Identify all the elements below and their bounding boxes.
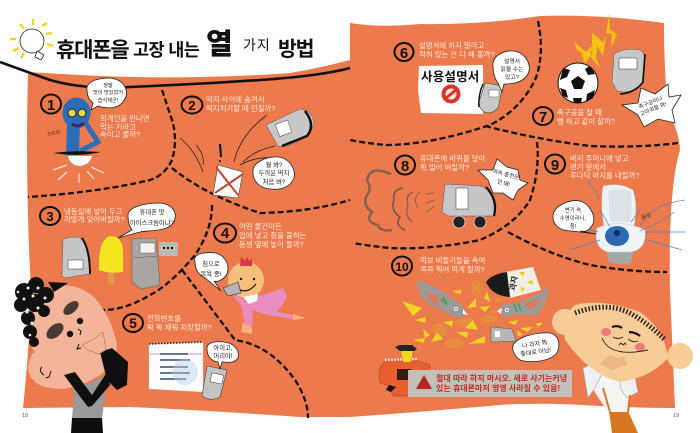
title: 고장 내는 (133, 40, 200, 60)
question text: 후다닥 바지를 내릴까? (570, 171, 639, 180)
icon: phone on wheels (442, 184, 496, 228)
icon: manual sheet: 사용설명서 (421, 70, 480, 84)
number 5: 5 (129, 315, 137, 331)
speech bubble: 설명서 (504, 57, 520, 65)
step 7: soccer ball (533, 15, 681, 127)
icon: snack crumbs (402, 280, 543, 348)
question text: 바지 주머니에 넣고 (570, 154, 629, 163)
body (72, 375, 107, 420)
step 6: manual (394, 41, 529, 114)
icon: phone (612, 49, 645, 94)
hand (600, 355, 627, 370)
step 2: ddakji (180, 95, 314, 198)
page number 18: 18 (22, 413, 28, 419)
question text: 휙 밀어 버릴까? (420, 163, 469, 172)
speech bubble: 변기 속 (565, 206, 581, 214)
speech bubble: 휴대폰 맛 (140, 207, 165, 216)
speech bubble: 아이고, (213, 343, 233, 352)
number 8: 8 (401, 158, 409, 175)
question text: 딱지치기할 때 던질까? (206, 104, 275, 113)
panel: right orange page (350, 16, 680, 417)
warning character (379, 345, 430, 396)
page number 19: 19 (673, 413, 679, 419)
icon: blue alien: 꼬르륵 (46, 130, 61, 138)
speech burst: 과속 충전은 (492, 167, 520, 182)
character: worried man left (14, 277, 128, 433)
icon: left pigeon (417, 280, 468, 318)
number 2: 2 (188, 98, 196, 113)
question text: 먹보 비둘기들을 속여 (420, 256, 485, 265)
title: 방법 (278, 38, 313, 61)
speech bubble: 첨! (570, 223, 577, 230)
speech burst: 고마워할 와! (638, 100, 668, 118)
speech bubble: 목욕 중! (201, 270, 222, 278)
step 4: baby (195, 222, 307, 334)
number 8 (395, 156, 415, 175)
question text: 딱지 사이에 숨겨서 (206, 95, 265, 104)
hair (14, 277, 68, 347)
speech bubble: 머리야! (213, 351, 233, 360)
question text: 까맣게 잊어버릴까? (64, 215, 125, 224)
speech bubble: 있고? (505, 73, 520, 81)
speech bubble (195, 253, 228, 291)
title brush line (0, 62, 350, 88)
icon: refrigerator (132, 238, 178, 289)
speech bubble (207, 342, 238, 369)
icon: phone (491, 327, 516, 342)
icon: warning triangle (416, 375, 432, 389)
icon: torn snack bag: 과자 (507, 274, 520, 291)
question text: 꽉 꽉 채워 저장할까? (147, 323, 212, 332)
speech bubble (87, 78, 126, 110)
pants (609, 411, 638, 433)
warning banner: 있는 휴대폰마저 영영 사라질 수 있음! (436, 383, 560, 393)
question text: 콕콕 찍어 먹게 할까? (420, 265, 485, 274)
question text: 변기 앞에서 (570, 162, 606, 172)
icon: frozen phone (62, 237, 90, 278)
speech bubble: 침으로 (202, 260, 220, 268)
step 3: freezer (40, 203, 178, 289)
icon: exhaust puffs (365, 171, 435, 230)
number 1: 1 (47, 97, 55, 114)
speech bubble: 아이스크림이냐? (130, 218, 175, 227)
icon: phone (478, 83, 503, 113)
icon: light bulb (10, 19, 53, 60)
step 1: alien (41, 78, 150, 183)
question text: 뻥 하고 같이 찰까? (557, 117, 615, 126)
warning banner (408, 370, 572, 397)
icon: lightning (574, 15, 617, 68)
step 5: phone numbers (123, 314, 238, 399)
number 3: 3 (46, 209, 54, 224)
warning banner: 절대 따라 하지 마시오. 새로 사기는커녕 (436, 373, 567, 383)
icon: notepad (149, 342, 203, 392)
question text: 적혀 있는 건 다 해 볼까? (419, 50, 495, 59)
speech bubble (513, 333, 559, 362)
question text: 어떤 물건이든 (239, 222, 282, 231)
speech bubble: 나 과자 뭐 (521, 338, 548, 350)
step 8: wheeled phone (365, 154, 528, 230)
hair (575, 307, 665, 340)
icon: phone in ddakji (180, 109, 314, 198)
number 10: 10 (395, 260, 409, 274)
panel: left orange page (23, 60, 350, 417)
speech bubble: 두꺼운 딱지 (259, 168, 289, 177)
speech burst: 안 돼! (496, 177, 512, 189)
speech bubble: 수영이라니, (560, 214, 587, 222)
speech bubble (253, 157, 294, 189)
head (564, 303, 668, 382)
shirt (590, 366, 632, 412)
question text: 설명서에 하지 말라고 (419, 41, 485, 50)
number 7 (533, 107, 553, 126)
number 4: 4 (221, 225, 230, 242)
question text: 냉동실에 넣어 두고 (64, 207, 123, 216)
speech burst (478, 159, 528, 200)
number 10 (392, 256, 412, 276)
icon: torn snack bag (486, 267, 541, 298)
question text: 입에 넣고 침을 붙히는 (239, 231, 307, 240)
speech bubble: 습식체군! (98, 96, 118, 104)
question text: 속이고 줄까? (100, 130, 140, 139)
speech bubble: 뭘 봐? (266, 160, 283, 169)
step 9: toilet (545, 154, 685, 264)
icon: phone (202, 366, 227, 399)
speech bubble: 정말 (103, 81, 113, 89)
speech burst: 축구공이나 (637, 94, 664, 111)
icon: soccer ball (558, 63, 598, 103)
title: 휴대폰을 (56, 39, 129, 62)
speech bubble: 맛이 맛있었어 (93, 88, 123, 96)
icon: ice cream bar (99, 236, 123, 284)
speech bubble: 처음 봐? (263, 177, 286, 186)
question text: 축구공을 찰 때 (557, 108, 602, 117)
speech bubble (553, 201, 596, 234)
question text: 휴대폰에 바퀴를 달아 (420, 154, 486, 163)
speech bubble (118, 203, 175, 238)
title: 열 (206, 28, 233, 61)
step 10: pigeons (392, 256, 559, 362)
face (601, 328, 611, 336)
question text: 외계인을 만나면 (100, 114, 150, 123)
number 7: 7 (539, 109, 547, 126)
speech burst (622, 84, 681, 127)
icon: crawling baby (223, 257, 306, 334)
question text: 동생 옆에 놓아 둘까? (239, 240, 304, 249)
speech bubble (493, 51, 529, 92)
head (27, 286, 117, 389)
character: smiling man right (552, 303, 693, 433)
number 6: 6 (400, 45, 408, 62)
ears (552, 309, 578, 335)
number 9: 9 (551, 157, 559, 174)
speech bubble: 좋대로 아님! (520, 346, 552, 358)
arms and hand (64, 372, 110, 407)
icon: toilet: 풍덩 (640, 212, 652, 222)
title: 가지 (243, 37, 271, 53)
speech bubble: 읽을 수는 (501, 65, 524, 73)
question text: 전화번호를 (147, 314, 181, 323)
icon: right pigeon (497, 287, 549, 316)
question text: 먹는 거라고 (100, 122, 136, 132)
face (61, 298, 81, 318)
